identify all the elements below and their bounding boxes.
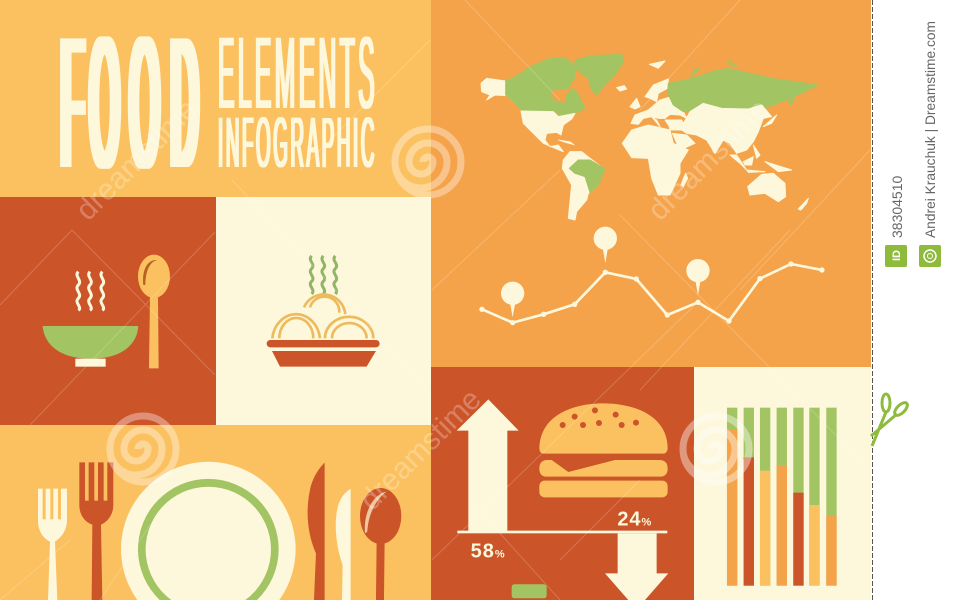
bar 5 — [793, 408, 804, 586]
icon: large knife — [308, 463, 325, 600]
bar 3 — [760, 408, 770, 586]
infographic canvas: INFOGRAPHIC — [218, 104, 377, 183]
value: 58%: 58% — [471, 540, 505, 562]
map: Iceland — [617, 86, 627, 91]
stacked bar chart — [727, 408, 837, 586]
chart points — [479, 261, 825, 325]
watermark spiral: title — [395, 129, 461, 195]
infographic canvas: ELEMENTS — [218, 16, 378, 130]
line chart with pins — [479, 227, 825, 325]
icon: soup steam — [77, 272, 104, 310]
world map: Americas — [481, 54, 624, 220]
map: Scandinavia — [645, 79, 668, 102]
map: Russian islands — [690, 60, 795, 106]
image credit: Andrei Krauchuk | Dreamstime.com — [922, 21, 938, 238]
chart line — [482, 264, 822, 323]
map: Brazil — [569, 160, 605, 192]
watermark text left: dreamstime — [70, 93, 204, 227]
icon: soup bowl — [43, 326, 138, 359]
panel: title background — [0, 0, 431, 197]
map: Russia — [668, 68, 818, 112]
watermark spiral: table — [110, 416, 176, 482]
panel: burger statistics — [431, 367, 694, 600]
arrow: down — [605, 533, 668, 600]
panel: table setting — [0, 425, 431, 600]
icon: pasta dish base — [272, 351, 376, 367]
map: Canada — [506, 58, 585, 118]
icon: noodles — [272, 295, 373, 338]
panel: soup — [0, 197, 216, 425]
icon: bowl foot — [75, 359, 106, 367]
map: Caribbean — [558, 140, 574, 145]
map: USA and Mexico — [521, 111, 575, 152]
image id badge: ID — [891, 250, 903, 261]
icon: pasta steam — [310, 256, 337, 294]
bar 4 — [777, 408, 787, 586]
pin 2 — [594, 227, 617, 263]
watermark text right: dreamstime — [642, 93, 776, 227]
title word: FOOD: FOOD — [61, 0, 198, 207]
value: 24%: 24% — [617, 509, 652, 531]
map: Alaska — [481, 78, 516, 103]
bar 6 — [809, 408, 820, 586]
icon: pasta dish rim — [267, 340, 380, 347]
panel: stacked bars — [694, 367, 871, 600]
map: Africa — [622, 125, 688, 195]
icon: spoon — [138, 255, 170, 368]
map: Madagascar — [681, 173, 688, 187]
map: Italy and Turkey — [652, 117, 683, 127]
watermark text center: dreamstime — [354, 383, 488, 517]
bar 1 — [727, 408, 737, 586]
arrow: up — [457, 399, 519, 532]
pin 1 — [501, 282, 524, 317]
image id: 38304510 — [889, 175, 905, 238]
panel: pasta — [216, 197, 431, 425]
map: Japan — [763, 115, 777, 127]
bar 7 — [826, 408, 837, 586]
map: Europe — [631, 97, 687, 124]
legend chip — [512, 584, 547, 598]
world map: Eastern hemisphere — [617, 60, 818, 210]
copyright badge — [919, 245, 941, 267]
map: British Isles — [630, 98, 640, 109]
map: New Zealand — [798, 198, 808, 210]
image id badge — [885, 245, 907, 267]
soup and spoon icons — [43, 255, 170, 368]
map: Svalbard — [649, 61, 665, 68]
map: Greenland — [575, 54, 624, 95]
icon: burger — [539, 403, 668, 497]
pasta icon — [267, 256, 380, 367]
title — [61, 0, 378, 207]
icon: plate — [121, 462, 296, 600]
baseline — [457, 531, 667, 533]
table setting illustration — [38, 462, 401, 600]
icon: table spoon — [360, 488, 401, 600]
map: Southeast Asia — [730, 145, 792, 172]
icon: small fork — [38, 489, 67, 600]
map: Asia — [668, 103, 772, 153]
icon: small knife — [336, 489, 351, 600]
panel: world map and line chart — [431, 0, 871, 367]
watermark spiral: bars — [683, 416, 749, 482]
burger statistics — [457, 399, 668, 600]
icon: scissors — [871, 394, 909, 446]
bar 2 — [744, 408, 754, 586]
map: Arabia — [672, 133, 695, 150]
map: South America — [562, 152, 603, 220]
map: Australia — [748, 173, 786, 202]
icon: large fork — [79, 462, 113, 600]
pin 3 — [686, 259, 710, 295]
cut line — [872, 0, 874, 600]
